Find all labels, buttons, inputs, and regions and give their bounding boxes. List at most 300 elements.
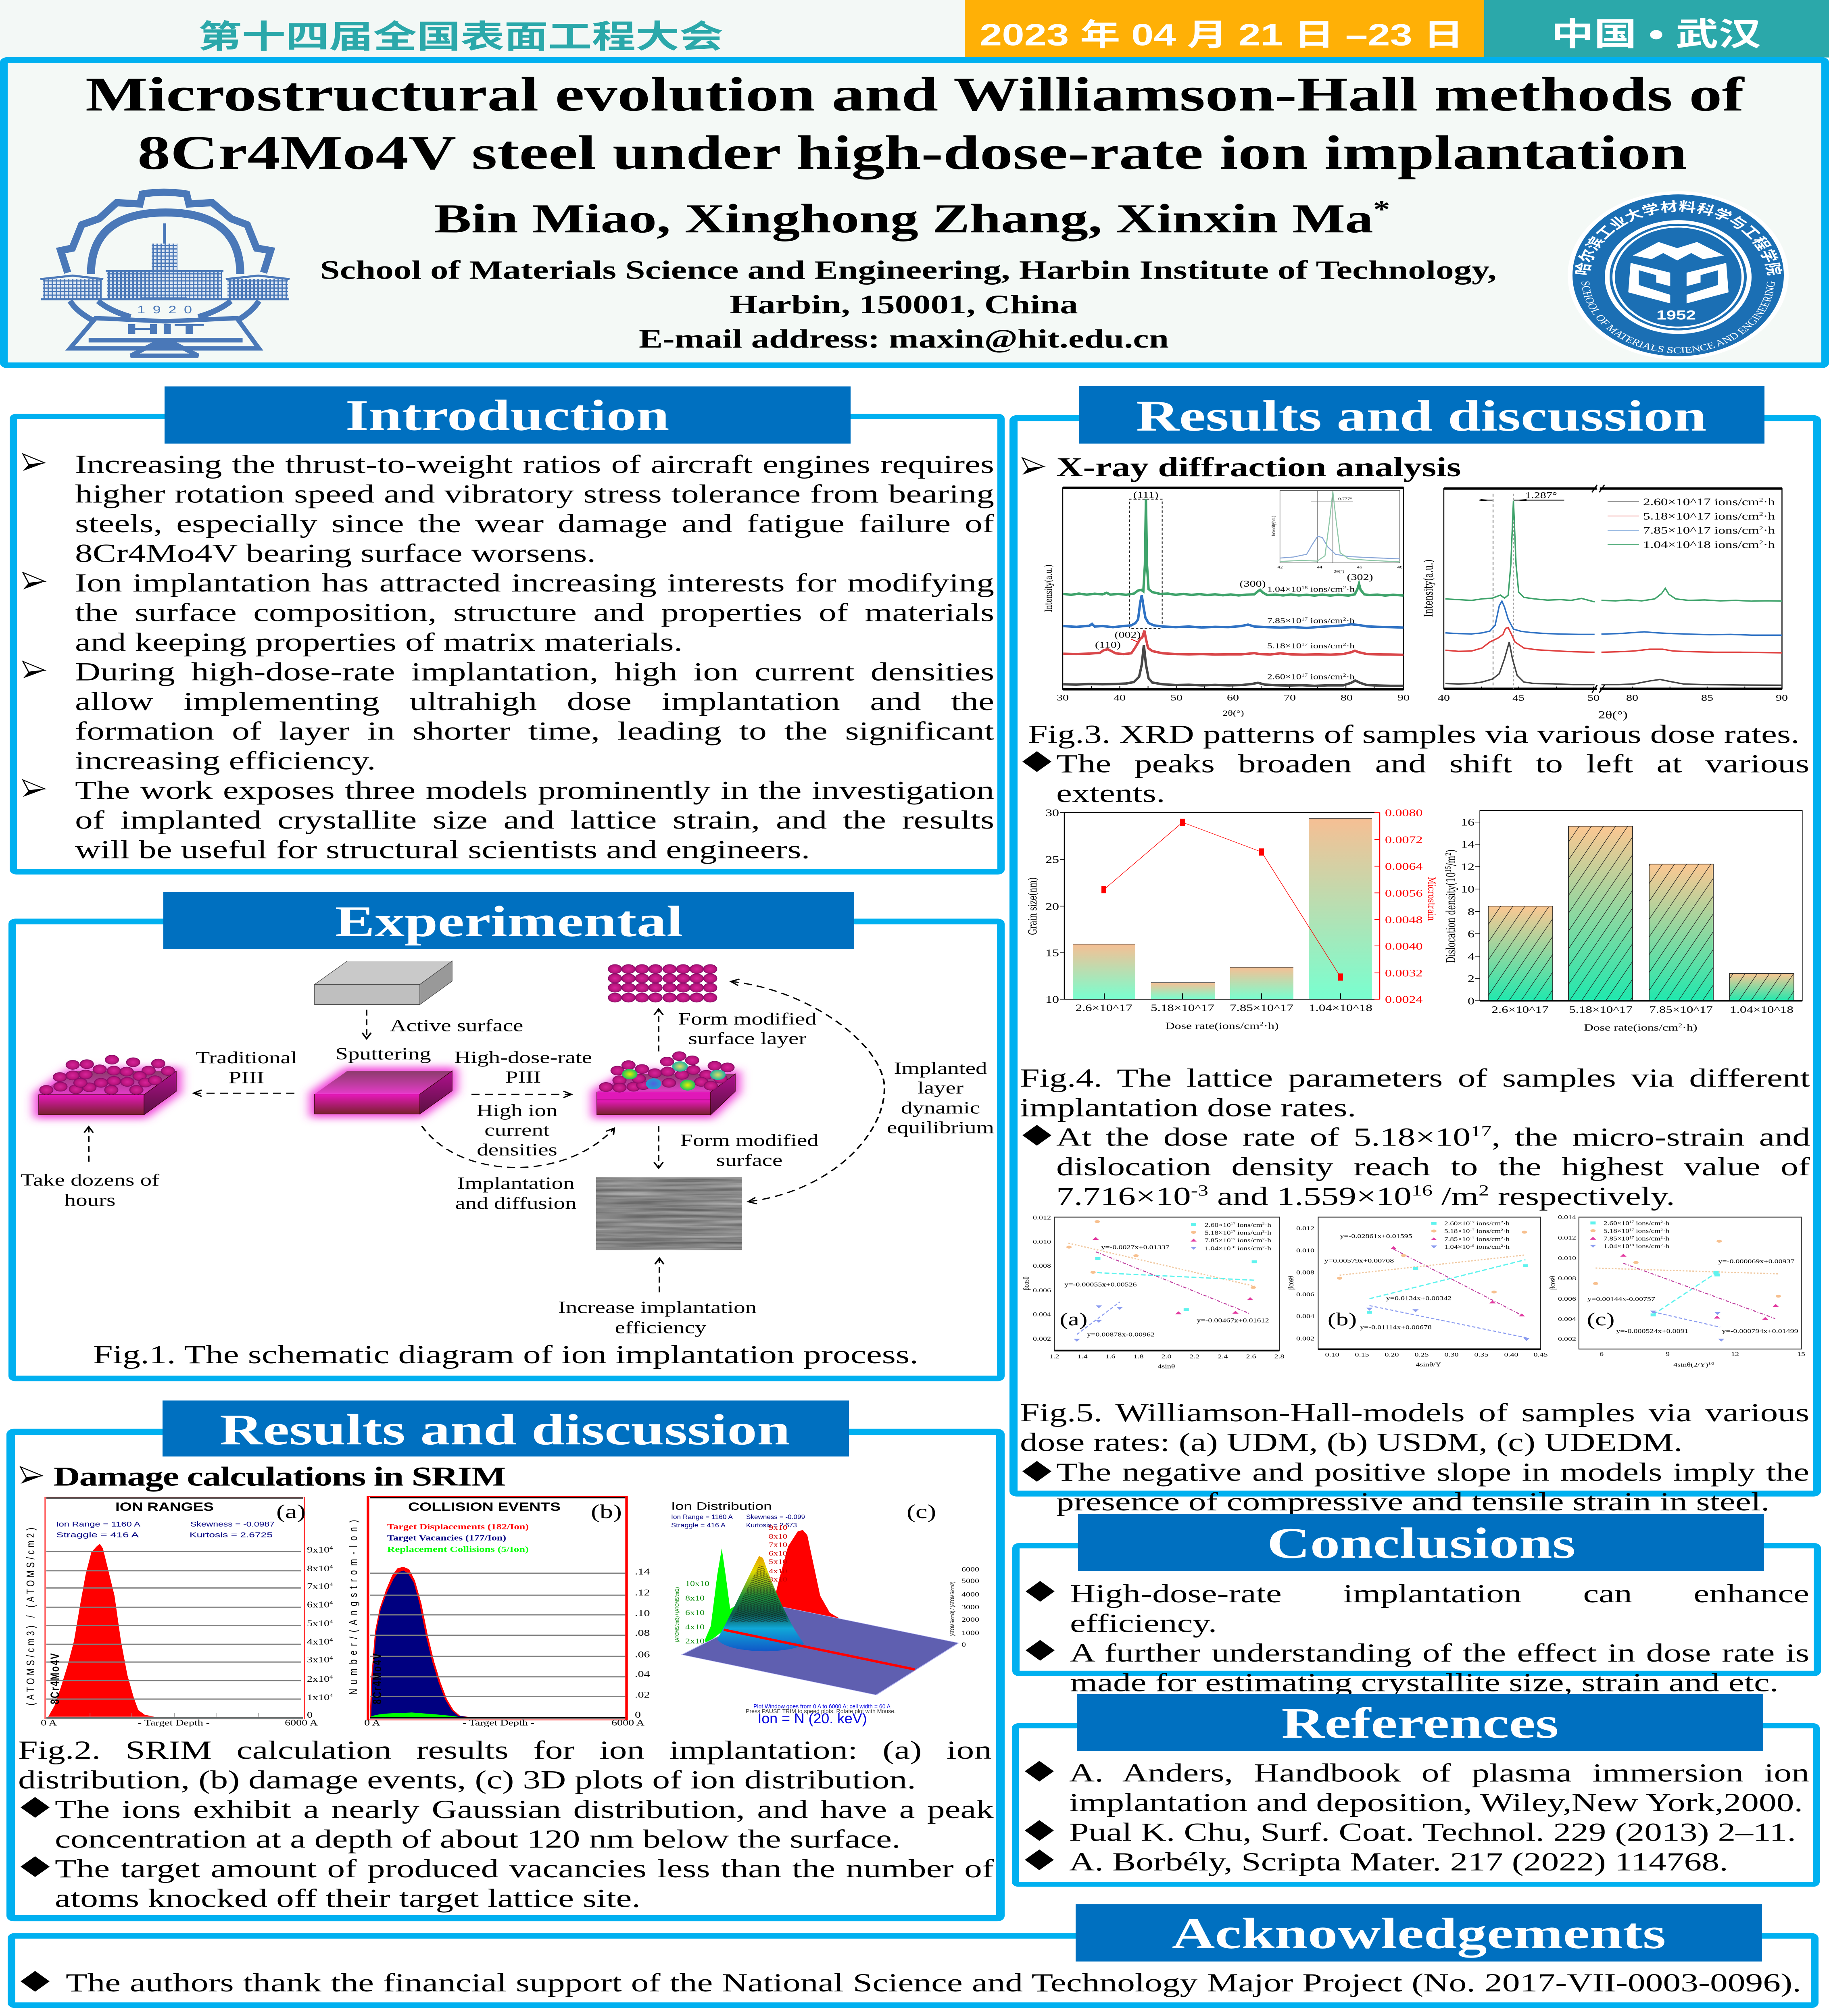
chart: ion distribution 3D: 10x10 — [685, 1580, 709, 1588]
chart: grain size and microstrain: 0.0040 — [1385, 941, 1422, 952]
chart: Williamson-Hall USDM: 2.60×10 — [1444, 1220, 1471, 1227]
chart: Williamson-Hall UDEDM: (c) — [1587, 1309, 1614, 1329]
chart: Williamson-Hall UDEDM: y=-0.000524x+0.0091 — [1616, 1327, 1689, 1334]
text block: introduction bullets: of implanted crystallite size and lattice strain, and the results — [75, 806, 994, 834]
caption: figure 5: dose rates: (a) UDM, (b) USDM, (c) UDEDM. — [1020, 1428, 1683, 1456]
chart: Williamson-Hall UDEDM: y=-0.000794x+0.01499 — [1722, 1327, 1798, 1334]
conference banner: 第十四届全国表面工程大会 — [198, 19, 723, 55]
chart: XRD patterns full range: (110) — [1095, 640, 1121, 650]
chart: ion distribution 3D: 6x10 — [769, 1550, 787, 1557]
chart: collision events: .12 — [635, 1588, 650, 1597]
chart: Williamson-Hall UDM: βcosθ — [1022, 1277, 1031, 1290]
chart: Williamson-Hall UDM: 0.012 — [1033, 1214, 1051, 1221]
chart: Williamson-Hall USDM: 0.10 — [1325, 1351, 1339, 1358]
chart: grain size and microstrain: 1.04×10^18 — [1309, 1003, 1372, 1014]
chart: Williamson-Hall UDM: 1.8 — [1134, 1353, 1144, 1360]
chart: Williamson-Hall UDM: 2.6 — [1246, 1353, 1256, 1360]
chart: collision events: COLLISION EVENTS — [408, 1500, 561, 1514]
chart: Williamson-Hall USDM: 18 — [1470, 1244, 1474, 1248]
chart: Williamson-Hall UDEDM: 2 — [1660, 1243, 1663, 1247]
chart: ion ranges: 4 — [330, 1600, 333, 1606]
chart: XRD patterns full range: ·h — [1346, 585, 1355, 594]
diagram labels: Traditional — [196, 1048, 297, 1067]
chart: XRD patterns full range: 42 — [1278, 565, 1283, 569]
chart: dislocation density: 14 — [1461, 839, 1474, 850]
chart: Williamson-Hall UDM: 0.010 — [1033, 1238, 1051, 1245]
chart: ion ranges: 0 A — [41, 1718, 57, 1728]
chart legend: 2 — [1759, 525, 1763, 531]
chart: ion ranges: 8x10 — [307, 1564, 330, 1573]
chart: ion ranges: 6x10 — [307, 1600, 330, 1610]
chart: ion distribution 3D: 2000 — [961, 1616, 979, 1623]
chart: Williamson-Hall UDEDM: 1/2 — [1708, 1362, 1714, 1366]
chart: ion distribution 3D: 6x10 — [685, 1609, 705, 1617]
chart: Williamson-Hall UDM: 2.4 — [1218, 1353, 1228, 1360]
chart: ion ranges: 4 — [330, 1619, 333, 1624]
text block: introduction bullets: and keeping properties of matrix materials. — [75, 628, 682, 656]
chart: Williamson-Hall UDEDM: y=0.00144x-0.00757 — [1587, 1295, 1655, 1302]
arrows — [89, 981, 884, 1292]
diagram labels: High ion — [476, 1101, 558, 1120]
chart: dislocation density: 8 — [1468, 906, 1474, 917]
text block: conclusions: High-dose-rate implantation can enhance — [1070, 1579, 1809, 1608]
chart: Williamson-Hall UDM: y=0.00878x-0.00962 — [1087, 1331, 1155, 1338]
chart: ion ranges: 2x10 — [307, 1674, 330, 1684]
text block: peaks broaden — [1022, 749, 1809, 808]
chart: ion distribution 3D: Press PAUSE TRIM to speed plots. Rotate plot with Mouse. — [746, 1708, 896, 1714]
poster title: 8Cr4Mo4V steel under high-dose-rate ion implantation — [138, 126, 1687, 180]
chart: Williamson-Hall USDM: 1.04×10 — [1444, 1243, 1471, 1250]
chart: ion distribution 3D: 8x10 — [685, 1594, 705, 1602]
chart: collision events: 0 A — [364, 1718, 380, 1728]
chart: Williamson-Hall UDM: 2.8 — [1274, 1353, 1285, 1360]
chart: XRD patterns zoomed range: 50 — [1587, 693, 1600, 703]
chart: XRD patterns full range: 2 — [1343, 616, 1346, 622]
chart: XRD patterns full range: (302) — [1347, 572, 1373, 582]
caption: figure 5 — [1020, 1398, 1809, 1457]
chart: dislocation density: Dose rate(ions/cm — [1584, 1023, 1678, 1033]
chart: ion ranges: (a) — [276, 1501, 306, 1522]
chart: collision events: (b) — [591, 1501, 622, 1522]
chart: XRD patterns full range: (300) — [1240, 579, 1266, 589]
chart: ion ranges: 4 — [330, 1675, 333, 1680]
heading: acknowledgements: Acknowledgements — [1172, 1909, 1666, 1958]
icon: school of materials seal: 哈尔滨工业大学材料科学与工程学院 — [1572, 199, 1784, 276]
chart: Williamson-Hall UDM: ·h — [1265, 1221, 1271, 1228]
chart: ion ranges: 0 — [307, 1710, 313, 1720]
chart: ion distribution 3D: 5000 — [961, 1578, 979, 1585]
chart: ion ranges: Kurtosis = 2.6725 — [190, 1531, 273, 1539]
chart: XRD patterns zoomed range: 80 — [1626, 693, 1638, 703]
chart: Williamson-Hall USDM: 4sinθ/Y — [1416, 1361, 1441, 1368]
chart: Williamson-Hall UDM: ions/cm — [1235, 1229, 1262, 1236]
chart: Williamson-Hall UDM: ions/cm — [1235, 1245, 1262, 1252]
chart: dislocation density: 0 — [1468, 996, 1474, 1007]
heading: results and discussion: Results and discussion — [220, 1406, 790, 1454]
chart: XRD patterns full range: 17 — [1301, 673, 1308, 678]
chart: collision events: .10 — [635, 1608, 650, 1618]
text block: introduction bullets: During high-dose-rate implantation, high ion current densities — [75, 657, 994, 686]
diagram labels — [21, 1009, 994, 1337]
chart: Williamson-Hall UDEDM — [1548, 1214, 1805, 1368]
text block: introduction bullets — [23, 450, 994, 867]
icon: SEM surface image — [596, 1177, 742, 1250]
chart: Williamson-Hall USDM: ions/cm — [1474, 1228, 1501, 1235]
chart: Williamson-Hall UDEDM: 17 — [1629, 1228, 1634, 1232]
chart: ion ranges: 4 — [330, 1582, 333, 1587]
panel: title — [4, 60, 1825, 365]
chart: dislocation density: 16 — [1461, 817, 1474, 828]
chart: collision events: Number/(Angstrom-Ion) — [347, 1520, 360, 1695]
chart: Williamson-Hall UDEDM: 12 — [1731, 1351, 1739, 1358]
icon: high-dose-rate PIII block — [597, 1051, 735, 1115]
icon: sphere lattice — [608, 964, 717, 1002]
heading: introduction: Introduction — [345, 391, 669, 440]
text block: slope findings — [1022, 1458, 1809, 1517]
heading: experimental: Experimental — [335, 897, 683, 946]
chart: XRD patterns full range: 7.85×10 — [1267, 616, 1302, 625]
chart: dislocation density: /m — [1444, 856, 1458, 866]
poster title: Microstructural evolution and Williamson-Hall methods of — [86, 68, 1745, 121]
caption: figure 4: Fig.4. The lattice parameters of samples via different — [1020, 1064, 1810, 1092]
chart legend: 5.18×10^17 ions/cm — [1643, 510, 1759, 522]
chart: Williamson-Hall UDM: 2.0 — [1162, 1353, 1172, 1360]
caption: figure 5: Fig.5. Williamson-Hall-models of samples via various — [1020, 1398, 1809, 1427]
icon: traditional PIII block — [39, 1055, 176, 1115]
chart: Williamson-Hall USDM: ·h — [1503, 1236, 1510, 1242]
chart: Williamson-Hall UDM: 2.2 — [1190, 1353, 1199, 1360]
chart: Williamson-Hall USDM: 5.18×10 — [1444, 1228, 1471, 1235]
text block: references list — [1025, 1758, 1809, 1877]
chart: Williamson-Hall UDM: 17 — [1231, 1222, 1235, 1226]
chart: XRD patterns full range: (111) — [1133, 490, 1158, 500]
chart: Williamson-Hall USDM: ions/cm — [1474, 1236, 1501, 1242]
chart: ion distribution 3D: 0 — [961, 1641, 966, 1648]
panel: references — [1016, 1694, 1816, 1884]
diagram labels: Implanted — [894, 1059, 987, 1078]
conference banner — [0, 0, 1829, 58]
chart: XRD patterns full range: 30 — [1057, 693, 1069, 702]
text block: conclusions — [1026, 1579, 1809, 1697]
icon: HIT logo: 1920 — [137, 304, 192, 316]
chart: ion distribution 3D: Kurtosis = 2.673 — [746, 1522, 797, 1529]
chart: ion distribution 3D: Straggle = 416 A — [671, 1522, 726, 1529]
chart: XRD patterns full range: 50 — [1170, 693, 1182, 702]
chart: XRD patterns full range: 70 — [1284, 693, 1296, 702]
chart: collision events: .08 — [635, 1628, 650, 1638]
chart: Williamson-Hall UDM: ions/cm — [1235, 1237, 1262, 1243]
chart: dislocation density: 2 — [1468, 973, 1474, 985]
chart: Williamson-Hall UDM: 1.04×10 — [1205, 1245, 1231, 1252]
chart: XRD patterns full range: ·h — [1346, 616, 1355, 625]
chart: grain size and microstrain: 0.0072 — [1385, 834, 1422, 846]
chart: XRD patterns full range: 40 — [1114, 693, 1126, 702]
text block: conclusions: efficiency. — [1070, 1609, 1217, 1637]
diagram labels: surface — [716, 1151, 782, 1170]
chart: collision events: 8Cr4Mo4V — [370, 1653, 384, 1704]
diagram labels: Take dozens of — [21, 1170, 159, 1189]
text block: introduction bullets: Increasing the thrust-to-weight ratios of aircraft engines requires — [75, 450, 994, 479]
chart: XRD patterns zoomed range: 1.287° — [1525, 490, 1557, 500]
chart: Williamson-Hall USDM: βcosθ — [1286, 1276, 1295, 1290]
text block: introduction bullets: steels, especially since the wear damage and fatigue failure of — [75, 509, 994, 538]
chart: dislocation density: ) — [1444, 850, 1458, 853]
text block: SRIM findings: concentration at a depth of about 120 nm below the surface. — [55, 1824, 901, 1854]
caption: figure 4 — [1020, 1063, 1810, 1123]
chart: Williamson-Hall USDM: 17 — [1470, 1228, 1474, 1232]
caption: figure 2: Fig.2. SRIM calculation results for ion implantation: (a) ion — [18, 1736, 992, 1764]
chart: Williamson-Hall UDEDM: 1.04×10 — [1604, 1243, 1630, 1250]
chart: XRD patterns full range: 2θ(°) — [1222, 709, 1244, 717]
chart: Williamson-Hall UDM: y=-0.00055x+0.00526 — [1064, 1281, 1137, 1288]
chart: ion distribution 3D: 1000 — [961, 1629, 979, 1637]
chart: XRD patterns zoomed range: 90 — [1776, 693, 1788, 703]
chart legend: 1.04×10^18 ions/cm — [1643, 539, 1759, 550]
chart: XRD patterns full range: 60 — [1227, 693, 1239, 702]
chart: ion ranges: 4 — [330, 1656, 333, 1661]
chart: collision events: .02 — [635, 1690, 650, 1700]
chart: ion distribution 3D: (c) — [907, 1501, 936, 1522]
chart: ion distribution 3D: Ion Distribution — [671, 1500, 772, 1512]
diagram labels: layer — [918, 1078, 964, 1097]
text block: SRIM findings — [21, 1795, 994, 1913]
chart: Williamson-Hall UDEDM: ·h — [1663, 1220, 1669, 1227]
heading: results and discussion: Results and discussion — [1136, 392, 1706, 440]
chart: collision events: Target Displacements (182/Ion) — [387, 1522, 529, 1531]
chart: grain size and microstrain: 15 — [1045, 948, 1059, 959]
diagram labels: densities — [477, 1140, 557, 1159]
chart legend: 2 — [1759, 539, 1763, 546]
chart: Williamson-Hall USDM: 0.35 — [1474, 1351, 1489, 1358]
chart: Williamson-Hall UDEDM: ·h — [1663, 1227, 1669, 1234]
chart: Williamson-Hall USDM: 0.45 — [1533, 1351, 1548, 1358]
chart legend: 2 — [1759, 496, 1763, 503]
chart: Williamson-Hall UDM: 17 — [1231, 1230, 1235, 1233]
chart: XRD patterns full range: 17 — [1301, 641, 1308, 647]
heading: references — [1077, 1694, 1763, 1751]
chart: ion distribution 3D: (ATOMS/cm3) / (ATOMS/cm2) — [949, 1582, 955, 1637]
chart: collision events — [347, 1497, 650, 1728]
chart: ion ranges: 6000 A — [285, 1718, 318, 1728]
chart: XRD patterns full range: 5.18×10 — [1267, 641, 1302, 650]
chart: XRD patterns full range: 2 — [1343, 585, 1346, 590]
chart: Williamson-Hall UDM: 18 — [1231, 1245, 1235, 1249]
diagram labels: PIII — [505, 1068, 541, 1087]
chart: XRD patterns full range: ·h — [1346, 641, 1355, 650]
chart: grain size and microstrain: Grain size(nm) — [1026, 877, 1039, 935]
chart: dislocation density: 1.04×10^18 — [1730, 1004, 1794, 1015]
chart: XRD patterns full range: Intensity(a.u.) — [1043, 564, 1054, 612]
heading: experimental — [163, 892, 854, 949]
chart: Williamson-Hall UDM: 2 — [1262, 1245, 1265, 1249]
chart: Williamson-Hall USDM: 2 — [1501, 1220, 1503, 1224]
chart: Williamson-Hall UDM: 2 — [1262, 1222, 1265, 1226]
text block: acknowledgement: The authors thank the financial support of the National Science and Technology Major Project (No. 2017-VII-0003-0096). — [66, 1968, 1801, 1997]
caption: figure 2: distribution, (b) damage events, (c) 3D plots of ion distribution. — [18, 1765, 916, 1794]
chart: dislocation density: 10 — [1461, 884, 1474, 895]
caption: figure 2 — [18, 1735, 992, 1795]
chart legend: ·h — [1763, 525, 1775, 536]
chart: Williamson-Hall UDM: y=-0.0027x+0.01337 — [1101, 1243, 1170, 1250]
chart: Williamson-Hall USDM: 0.006 — [1296, 1291, 1314, 1297]
chart: ion distribution 3D: 5x10 — [769, 1558, 787, 1566]
chart: Williamson-Hall USDM — [1286, 1217, 1548, 1368]
text block: references list: A. Anders, Handbook of plasma immersion ion — [1069, 1758, 1809, 1787]
chart: dislocation density: 2.6×10^17 — [1491, 1004, 1549, 1015]
chart: Williamson-Hall UDEDM: 0.006 — [1558, 1295, 1576, 1302]
caption: figure 4: implantation dose rates. — [1020, 1093, 1356, 1122]
conference banner: 2023 年 04 月 21 日 –23 日 — [980, 18, 1464, 52]
chart: XRD patterns full range: 2.60×10 — [1267, 673, 1302, 681]
chart: XRD patterns full range: 44 — [1317, 565, 1322, 569]
chart: XRD patterns zoomed range: 45 — [1512, 693, 1525, 703]
affiliation: E-mail address: maxin@hit.edu.cn — [639, 324, 1169, 353]
chart: Williamson-Hall USDM: 0.012 — [1296, 1225, 1314, 1231]
chart: Williamson-Hall UDEDM: ions/cm — [1634, 1243, 1661, 1250]
chart: ion distribution 3D: 2x10 — [685, 1637, 705, 1645]
text block: dose rate findings — [1022, 1122, 1810, 1211]
chart: Williamson-Hall UDEDM: 0.010 — [1558, 1255, 1576, 1261]
chart: dislocation density: 2 — [1678, 1022, 1682, 1029]
chart: XRD patterns full range: 2θ(°) — [1334, 570, 1345, 574]
chart: grain size and microstrain: ·h) — [1264, 1021, 1279, 1031]
chart: Williamson-Hall USDM: 0.25 — [1414, 1351, 1429, 1358]
chart: Williamson-Hall UDEDM: ·h — [1663, 1235, 1669, 1242]
chart: Williamson-Hall USDM: (b) — [1328, 1309, 1357, 1329]
chart: Williamson-Hall UDEDM: 9 — [1666, 1351, 1670, 1358]
chart: Williamson-Hall UDM: ·h — [1265, 1237, 1271, 1243]
heading: conclusions — [1078, 1514, 1764, 1571]
chart legend: ·h — [1763, 539, 1775, 550]
icon: school of materials seal: SCHOOL OF MATERIALS SCIENCE AND ENGINEERING — [1579, 281, 1778, 355]
chart: Williamson-Hall USDM: ions/cm — [1474, 1220, 1501, 1227]
chart: XRD patterns zoomed range: 2θ(°) — [1598, 709, 1628, 721]
chart: collision events: 0 — [635, 1710, 641, 1720]
text block: peaks broaden: The peaks broaden and shift to left at various — [1056, 749, 1809, 778]
panel: results and discussion (left) — [10, 1400, 1000, 1918]
chart: Williamson-Hall UDEDM: 0.002 — [1558, 1335, 1576, 1342]
text block: introduction bullets: The work exposes three models prominently in the investigation — [75, 776, 994, 804]
chart: XRD patterns full range: 17 — [1301, 616, 1308, 622]
text block: introduction bullets: will be useful for structural scientists and engineers. — [75, 835, 810, 864]
icon: school of materials seal: 1952 — [1656, 308, 1696, 323]
text block: introduction bullets: Ion implantation has attracted increasing interests for modifying — [75, 569, 994, 597]
chart: Williamson-Hall USDM: ·h — [1503, 1243, 1510, 1250]
chart: ion distribution 3D: Ion Range = 1160 A — [671, 1513, 733, 1520]
chart: grain size and microstrain: 0.0056 — [1385, 888, 1423, 899]
chart: XRD patterns full range: ions/cm — [1308, 641, 1343, 650]
chart: grain size and microstrain: 20 — [1045, 901, 1059, 912]
chart: dislocation density: 15 — [1444, 866, 1453, 872]
text block: references list: Pual K. Chu, Surf. Coat. Technol. 229 (2013) 2–11. — [1069, 1818, 1796, 1847]
chart: dislocation density — [1444, 810, 1802, 1033]
authors: Bin Miao, Xinghong Zhang, Xinxin Ma — [434, 196, 1373, 242]
chart: grain size and microstrain: 2.6×10^17 — [1075, 1003, 1132, 1014]
chart: dislocation density: 4 — [1468, 951, 1474, 962]
icon: HIT logo — [40, 192, 290, 356]
chart: Williamson-Hall UDEDM: 7.85×10 — [1604, 1235, 1630, 1242]
authors: * — [1373, 195, 1390, 223]
chart: collision events: - Target Depth - — [463, 1718, 534, 1728]
chart: grain size and microstrain: Microstrain — [1425, 877, 1437, 921]
chart: Williamson-Hall UDM: 0.008 — [1033, 1262, 1051, 1269]
icon: HIT logo: HIT — [125, 321, 204, 337]
chart: dislocation density: 6 — [1468, 929, 1474, 940]
chart: Williamson-Hall USDM: y=0.0134x+0.00342 — [1386, 1295, 1452, 1302]
chart legend: 7.85×10^17 ions/cm — [1643, 525, 1759, 536]
chart: XRD patterns zoomed range: Intensity(a.u.) — [1422, 560, 1436, 617]
chart: Williamson-Hall UDEDM: y=-0.000069x+0.00937 — [1718, 1258, 1795, 1265]
chart: XRD patterns full range: 48 — [1397, 565, 1403, 569]
chart: Williamson-Hall UDEDM: ions/cm — [1634, 1235, 1661, 1242]
chart: Williamson-Hall USDM: 17 — [1470, 1220, 1474, 1224]
chart: dislocation density: 7.85×10^17 — [1649, 1004, 1713, 1015]
chart: ion distribution 3D: 3000 — [961, 1604, 979, 1611]
text block: SRIM findings: The ions exhibit a nearly Gaussian distribution, and have a peak — [55, 1795, 994, 1824]
chart legend: ·h — [1763, 510, 1775, 522]
chart: collision events: 6000 A — [611, 1718, 644, 1728]
chart: ion distribution 3D: Plot Window goes from 0 A to 6000 A; cell width = 60 A — [753, 1703, 891, 1710]
heading: conclusions: Conclusions — [1267, 1519, 1575, 1568]
diagram labels: Active surface — [390, 1016, 523, 1035]
heading: references: References — [1281, 1699, 1559, 1747]
chart: Williamson-Hall UDEDM: 0.014 — [1558, 1214, 1576, 1220]
chart: grain size and microstrain: 5.18×10^17 — [1151, 1003, 1214, 1014]
chart: ion ranges: 7x10 — [307, 1582, 330, 1591]
chart: ion ranges: 4 — [330, 1637, 333, 1643]
chart: grain size and microstrain: 30 — [1045, 807, 1059, 818]
chart: XRD patterns full range: ions/cm — [1308, 616, 1343, 625]
chart: collision events: Replacement Collisions (5/Ion) — [387, 1545, 529, 1554]
chart: Williamson-Hall USDM: ·h — [1503, 1228, 1510, 1235]
affiliation: Harbin, 150001, China — [730, 290, 1078, 319]
chart: ion ranges: 4x10 — [307, 1637, 330, 1646]
chart: ion ranges: 5x10 — [307, 1619, 330, 1628]
chart: grain size and microstrain — [1026, 807, 1437, 1031]
text block: introduction bullets: allow implementing ultrahigh dose implantation and the — [75, 687, 994, 716]
chart: Williamson-Hall UDEDM: 4sinθ(2/Y) — [1673, 1361, 1708, 1368]
text block: dose rate findings: At the dose rate of 5.18×1017, the micro-strain and — [1056, 1123, 1810, 1151]
chart: Williamson-Hall UDM: 2 — [1262, 1237, 1265, 1241]
chart: Williamson-Hall USDM: 0.002 — [1296, 1335, 1314, 1342]
chart: Williamson-Hall USDM: 2 — [1501, 1236, 1503, 1240]
chart: Williamson-Hall UDEDM: 0.004 — [1558, 1315, 1576, 1322]
chart: XRD patterns full range: Intensity(a.u.) — [1271, 516, 1276, 536]
diagram labels: dynamic — [901, 1098, 980, 1117]
chart: Williamson-Hall UDEDM: ions/cm — [1634, 1227, 1661, 1234]
chart: grain size and microstrain: 7.85×10^17 — [1230, 1003, 1293, 1014]
caption: figure 1: Fig.1. The schematic diagram of ion implantation process. — [93, 1340, 918, 1369]
chart: Williamson-Hall USDM: 2 — [1501, 1244, 1503, 1248]
chart: Williamson-Hall UDM: ions/cm — [1235, 1221, 1262, 1228]
chart: XRD patterns full range: 90 — [1397, 693, 1410, 702]
diagram labels: PIII — [229, 1068, 264, 1087]
chart: Williamson-Hall UDM: 1.2 — [1049, 1353, 1059, 1360]
chart: ion distribution 3D: Skewness = -0.099 — [746, 1513, 805, 1520]
poster title — [86, 68, 1745, 180]
chart: ion ranges: Straggle = 416 A — [56, 1531, 139, 1539]
panel: conclusions — [1016, 1514, 1817, 1697]
chart: Williamson-Hall UDEDM: 0.008 — [1558, 1275, 1576, 1281]
chart: ion ranges: - Target Depth - — [138, 1718, 210, 1728]
chart: Williamson-Hall UDM: 5.18×10 — [1205, 1229, 1231, 1236]
text block: dose rate findings: dislocation density reach to the highest value of — [1056, 1152, 1810, 1181]
chart: ion distribution 3D: 6000 — [961, 1566, 979, 1573]
chart: Williamson-Hall USDM: 17 — [1470, 1236, 1474, 1240]
chart: ion ranges: 1x10 — [307, 1693, 330, 1702]
chart: grain size and microstrain: 0.0080 — [1385, 807, 1422, 818]
chart: Williamson-Hall UDEDM: 2 — [1660, 1228, 1663, 1232]
